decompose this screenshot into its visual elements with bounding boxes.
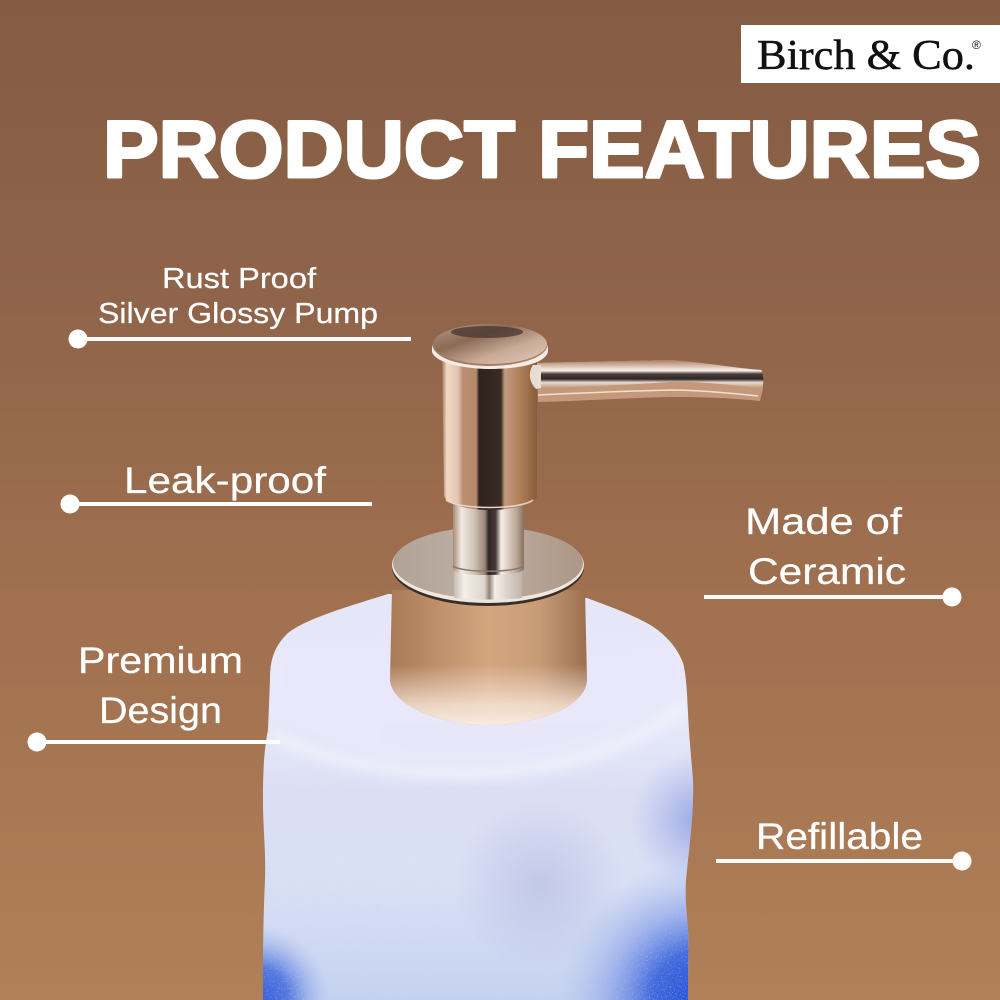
ceramic bottle body xyxy=(255,585,700,1000)
callout: made of ceramic: Ceramic xyxy=(748,551,906,592)
pump base xyxy=(390,527,587,725)
title: PRODUCT FEATURES xyxy=(103,105,981,195)
callout: premium design xyxy=(28,640,280,752)
callout: made of ceramic: Made of xyxy=(745,501,903,542)
brand name: Birch & Co. xyxy=(757,33,975,79)
pump cap xyxy=(432,324,548,369)
callout: refillable: Refillable xyxy=(756,816,923,857)
registered mark: ® xyxy=(972,38,981,52)
callout: leak-proof xyxy=(60,460,372,514)
callout: rust proof pump xyxy=(68,263,411,348)
pump spout xyxy=(530,360,763,402)
callout: premium design: Design xyxy=(99,690,222,731)
product: soap dispenser xyxy=(255,324,763,1000)
logo badge xyxy=(741,25,1000,83)
callout: leak-proof: Leak-proof xyxy=(124,460,327,501)
pump neck xyxy=(453,505,524,575)
callout: rust proof pump: Rust Proof xyxy=(162,263,317,295)
callout: rust proof pump: Silver Glossy Pump xyxy=(98,298,378,330)
callout: premium design: Premium xyxy=(78,640,243,681)
pump stem xyxy=(442,350,537,510)
callout: refillable xyxy=(716,816,972,870)
callout: made of ceramic xyxy=(704,501,962,606)
